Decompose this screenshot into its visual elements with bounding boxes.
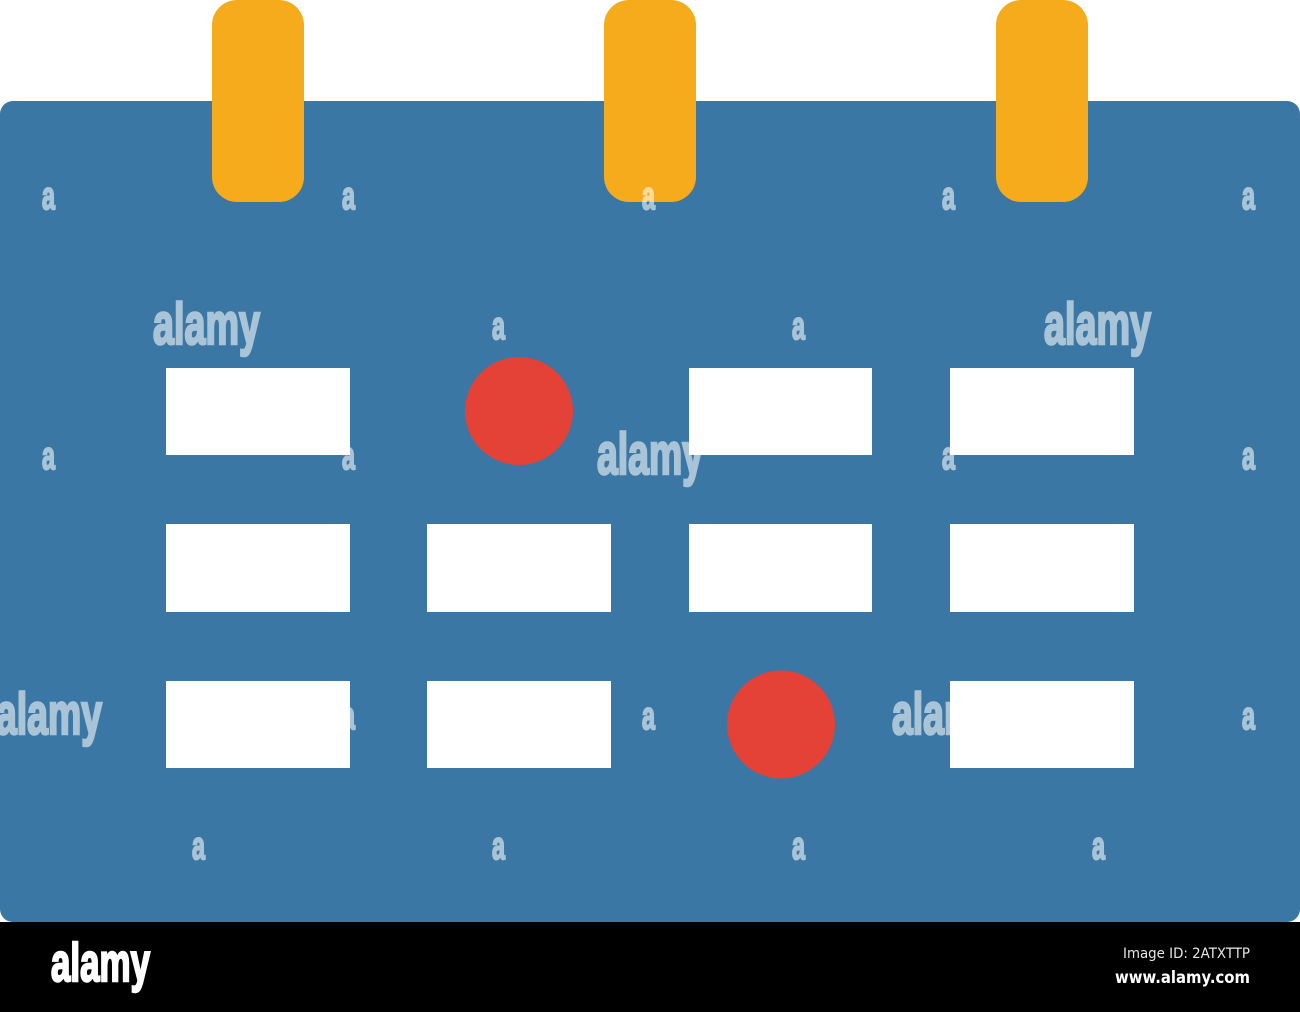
watermark pattern: a xyxy=(342,175,355,218)
image id: Image ID: 2ATXTTP xyxy=(1123,946,1250,962)
calendar date grid xyxy=(166,357,1134,778)
row 1 dates xyxy=(166,368,1134,455)
watermark pattern: alamy xyxy=(892,682,998,747)
watermark pattern: a xyxy=(342,695,355,738)
footer bar xyxy=(0,922,1300,1012)
watermark pattern: a xyxy=(642,175,655,218)
watermark pattern: alamy xyxy=(1044,292,1151,357)
watermark pattern: a xyxy=(792,305,805,348)
watermark pattern: a xyxy=(942,435,955,478)
watermark pattern: a xyxy=(342,435,355,478)
watermark pattern: a xyxy=(1242,695,1255,738)
website: www.alamy.com xyxy=(1115,968,1250,987)
watermark pattern: a xyxy=(942,175,955,218)
icon: marked date row 3 xyxy=(727,670,835,778)
watermark pattern: a xyxy=(1242,435,1255,478)
icon: calendar binding tabs xyxy=(212,0,1088,202)
watermark pattern: a xyxy=(642,695,655,738)
watermark pattern: a xyxy=(42,175,55,218)
logo: alamy: alamy xyxy=(51,933,150,993)
watermark pattern xyxy=(0,175,1255,868)
icon: marked date row 1 xyxy=(465,357,573,465)
watermark pattern: a xyxy=(192,825,205,868)
watermark pattern: a xyxy=(492,825,505,868)
watermark pattern: a xyxy=(492,305,505,348)
watermark pattern: alamy xyxy=(153,292,260,357)
row 3 dates xyxy=(166,681,1134,768)
watermark pattern: a xyxy=(1242,175,1255,218)
watermark pattern: alamy xyxy=(0,682,102,747)
watermark pattern: a xyxy=(42,435,55,478)
row 2 dates xyxy=(166,524,1134,612)
watermark pattern: a xyxy=(792,825,805,868)
watermark pattern: a xyxy=(1092,825,1105,868)
watermark pattern: alamy xyxy=(597,422,703,487)
